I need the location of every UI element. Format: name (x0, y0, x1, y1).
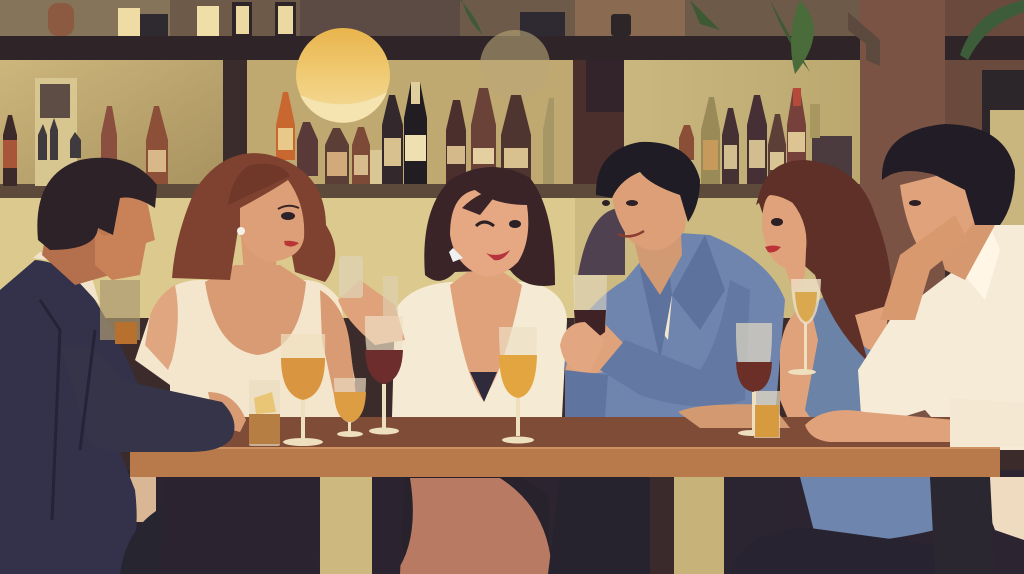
person: woman with long auburn hair (730, 160, 935, 574)
drinks: amber shot glass (754, 391, 780, 438)
bottle shelf: centre group (276, 82, 554, 184)
drinks: flute held by right woman (788, 279, 821, 375)
bottle shelf: left group (3, 78, 168, 186)
person: man in blue shirt (548, 142, 790, 574)
drinks: champagne glass centre (499, 327, 537, 444)
blue shirt man's hand on table (678, 404, 790, 428)
person: man in navy suit (0, 158, 296, 574)
person: centre woman winking (338, 167, 567, 574)
background glasses behind man (100, 280, 140, 344)
person: woman in white dress (135, 153, 356, 574)
drinks: red wine glass centre left (365, 316, 403, 434)
floor area under table (0, 470, 1024, 574)
top shelf items (48, 0, 1024, 74)
white shirt man's forearm on table (805, 398, 1024, 447)
bottle shelf: right group (679, 88, 852, 186)
icon: pendant lamp (296, 28, 550, 123)
drinks: glass held by blue shirt man (560, 275, 607, 372)
table (130, 417, 1000, 477)
man's arm resting on table (40, 300, 246, 520)
person: man in white shirt, hand on chin (858, 124, 1024, 574)
drinks: red wine glass right (736, 323, 772, 436)
drinks: tall amber wine glass (281, 334, 325, 446)
drinks: glass held by centre woman (339, 256, 398, 316)
drinks: whisky tumbler (249, 380, 280, 446)
drinks: small amber glass (334, 378, 366, 437)
